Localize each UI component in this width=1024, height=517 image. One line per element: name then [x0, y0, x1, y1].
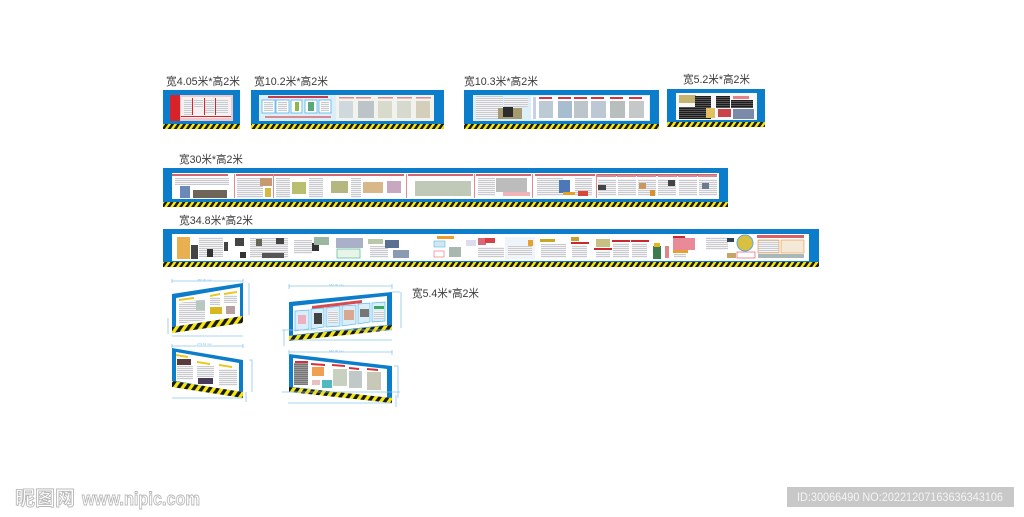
panel: angled board B — [172, 342, 252, 402]
panel: 30m board — [163, 168, 728, 207]
panel: 4.05m board — [163, 90, 240, 129]
panel: angled board D — [282, 349, 400, 407]
label: 10.2m: 宽10.2米*高2米 — [254, 74, 328, 88]
panel: 10.3m board — [464, 90, 659, 129]
panel: 34.8m board — [163, 229, 819, 267]
watermark: nipic logo: www.nipic.com — [81, 489, 200, 509]
label: 34.8m: 宽34.8米*高2米 — [179, 213, 253, 227]
watermark: nipic logo — [15, 482, 200, 511]
panel: 5.2m board — [667, 89, 765, 127]
panel: angled board D: 540.00 mm — [329, 349, 345, 353]
watermark: id bar — [787, 487, 1014, 507]
watermark: nipic logo: 昵图网 — [15, 482, 75, 511]
label: 5.2m: 宽5.2米*高2米 — [683, 72, 750, 86]
watermark: id bar: ID:30066490 NO:20221207163636343106 — [797, 490, 1003, 504]
panel: angled board A — [168, 278, 249, 336]
label: 10.3m: 宽10.3米*高2米 — [464, 74, 538, 88]
panel: angled board A: 285.00 mm — [197, 278, 213, 282]
label: 4.05m: 宽4.05米*高2米 — [166, 74, 240, 88]
panel: angled board C — [282, 283, 401, 346]
label: 5.4m: 宽5.4米*高2米 — [412, 286, 479, 300]
panel: angled board C: 542.00 mm — [329, 283, 345, 287]
label: 30m: 宽30米*高2米 — [179, 152, 243, 166]
panel: 10.2m board — [251, 90, 444, 129]
panel: angled board B: 279.94 mm — [197, 342, 213, 346]
